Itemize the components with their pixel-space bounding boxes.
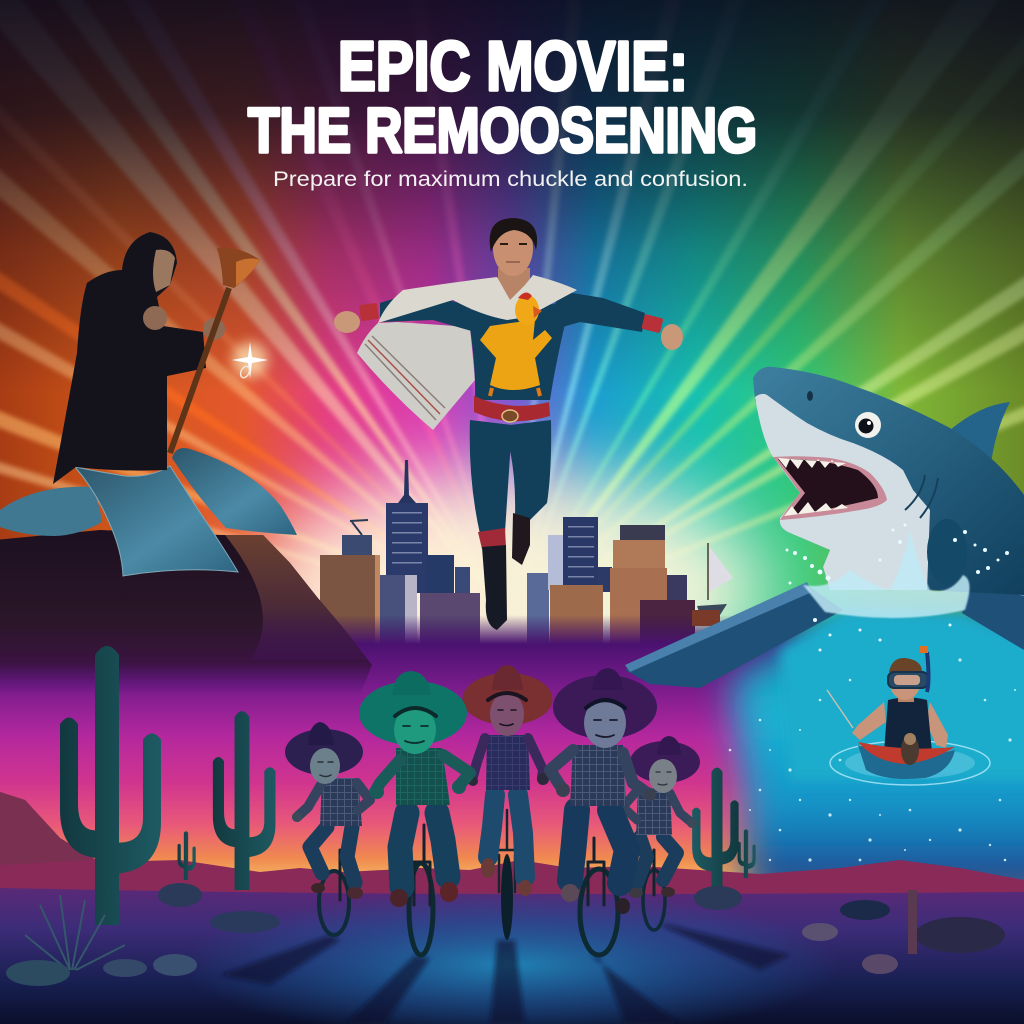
unicyclist 1: small cowboy [285, 722, 370, 935]
city skyline [320, 460, 695, 655]
neck and head [498, 268, 530, 300]
white belly [755, 394, 930, 590]
title: THE REMOOSENING [248, 96, 757, 166]
unicyclist 4: purple hat cowboy [550, 668, 657, 955]
magic sparkle [232, 342, 268, 379]
shirt [320, 778, 362, 826]
blue ground glow [180, 890, 840, 1024]
left ridge shading [0, 792, 90, 865]
teeth [778, 458, 846, 469]
sparkling water glitter [729, 658, 1016, 881]
plunger [170, 248, 260, 453]
saguaro cacti [60, 646, 756, 925]
torso [467, 303, 570, 400]
unicycle shadows [220, 925, 790, 1024]
body [753, 367, 1024, 595]
desert sky [0, 615, 1024, 905]
belt [474, 396, 550, 421]
dorsal fin [950, 402, 1010, 470]
horizon glow [250, 470, 770, 710]
rocky hill [0, 530, 372, 695]
villain in dark robe [53, 232, 268, 484]
tagline: Prepare for maximum chuckle and confusion. [273, 168, 748, 191]
background sky with rainbow gradient [0, 0, 1024, 700]
unicyclist 2: green cowboy [359, 671, 470, 955]
desert shrubs and rocks [6, 883, 1005, 986]
legs [470, 420, 512, 534]
swimming pool [625, 575, 1024, 900]
face [310, 748, 340, 784]
sailboat [692, 543, 733, 626]
nostril [807, 391, 813, 401]
pillows [0, 448, 297, 576]
unicyclist 5: small cowboy [623, 736, 700, 930]
face [153, 250, 175, 292]
eye [855, 412, 881, 438]
superhero flying [334, 218, 683, 630]
hands [143, 306, 167, 330]
gills [905, 475, 938, 518]
pectoral fin [927, 519, 967, 585]
cape back [357, 322, 475, 430]
rubber chicken [480, 292, 552, 396]
top dark fade [0, 0, 1024, 700]
wheel [319, 871, 349, 935]
title [248, 27, 757, 166]
legs [310, 827, 327, 873]
shark [753, 367, 1024, 595]
rainbow light rays [0, 0, 1024, 620]
snorkeler in inflatable boat [827, 646, 990, 785]
unicyclist 3: centre cowboy [462, 665, 552, 940]
hat [285, 729, 363, 775]
open mouth [773, 456, 887, 520]
desert ground [0, 888, 1024, 1024]
distant mountains [0, 792, 1024, 905]
pool walls [625, 585, 843, 688]
water splash [786, 524, 1009, 652]
arms [380, 295, 475, 332]
title: EPIC MOVIE: [338, 27, 688, 105]
cape collar [378, 275, 577, 323]
